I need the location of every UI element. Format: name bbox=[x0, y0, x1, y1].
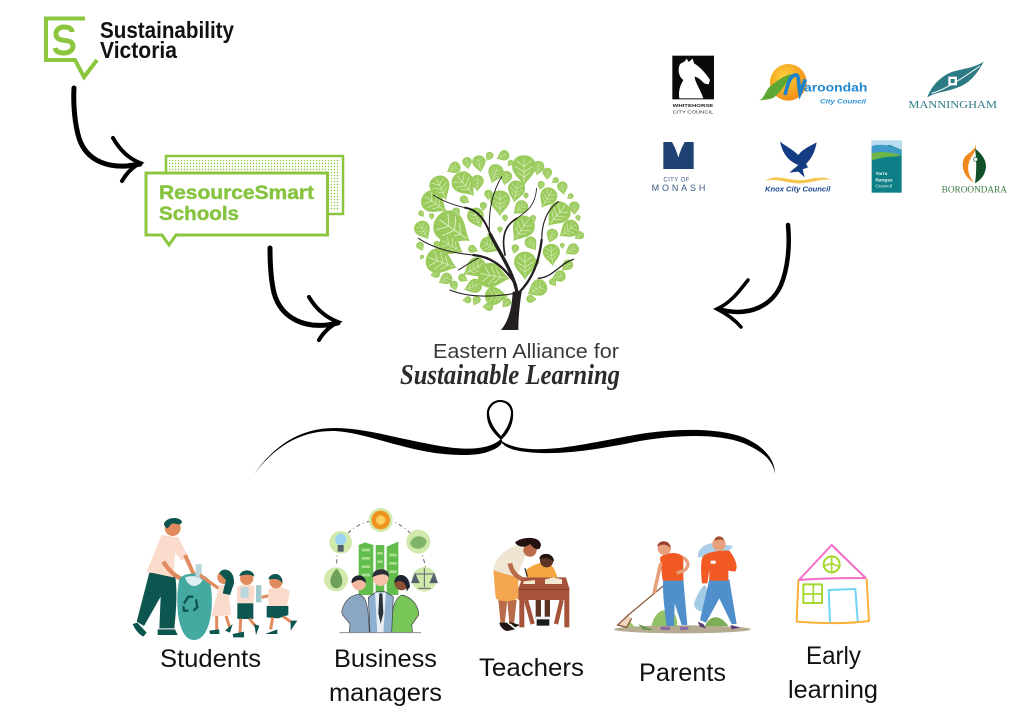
label: Students: Students bbox=[160, 645, 261, 673]
logo: Whitehorse bbox=[672, 56, 714, 115]
logo: Knox City Council bbox=[765, 141, 831, 194]
arrow: ResourceSmart to Alliance bbox=[270, 248, 338, 340]
icon: child's drawing of a house bbox=[797, 545, 869, 623]
logo: City of Monash: MONASH bbox=[652, 183, 705, 193]
icon: business team with green city bbox=[324, 508, 437, 633]
icon: green speech bracket bbox=[46, 18, 97, 77]
label: Business managers: managers bbox=[329, 679, 442, 707]
logo: Yarra Ranges: Council bbox=[875, 184, 892, 190]
logo: Whitehorse: CITY COUNCIL bbox=[673, 109, 714, 115]
logo: Manningham bbox=[908, 62, 997, 111]
logo: Whitehorse: WHITEHORSE bbox=[673, 103, 714, 109]
heading: Sustainable Learning: Sustainable Learning bbox=[400, 360, 620, 391]
logo: Boroondara bbox=[942, 141, 1007, 196]
logo: Maroondah: aroondah bbox=[804, 81, 867, 95]
logo: ResourceSmart Schools bbox=[146, 156, 343, 245]
text: programme name: Schools bbox=[159, 204, 239, 225]
audience labels bbox=[160, 642, 878, 707]
logo: Boroondara: BOROONDARA bbox=[942, 186, 1007, 196]
logo: Maroondah bbox=[759, 64, 867, 105]
tree trunk and branches bbox=[418, 177, 573, 330]
icon: adult and children recycling bbox=[133, 518, 297, 640]
logo: Maroondah: City Council bbox=[820, 98, 866, 105]
back dotted speech box bbox=[166, 156, 343, 214]
logo: Eastern Alliance tree bbox=[411, 148, 586, 330]
label: Business managers bbox=[329, 645, 442, 707]
text: organisation name: Sustainability bbox=[100, 17, 234, 43]
logo: Knox City Council: Knox City Council bbox=[765, 185, 831, 194]
arrow: councils to Alliance bbox=[717, 225, 789, 327]
text: programme name bbox=[159, 183, 315, 225]
text: programme name: ResourceSmart bbox=[159, 183, 315, 204]
text: organisation name: Victoria bbox=[100, 37, 177, 63]
logo: Manningham: MANNINGHAM bbox=[908, 100, 997, 111]
logo: City of Monash bbox=[652, 142, 705, 193]
heading: Eastern Alliance for: Eastern Alliance for bbox=[433, 341, 619, 363]
logo: Yarra Ranges: Yarra bbox=[875, 171, 888, 177]
logo: Sustainability Victoria bbox=[46, 17, 234, 77]
logo: Yarra Ranges bbox=[872, 141, 902, 193]
logo: City of Monash: CITY OF bbox=[663, 178, 690, 184]
label: Business managers: Business bbox=[334, 645, 437, 673]
audience illustrations, teachers, parents, early learning bbox=[493, 536, 869, 633]
front speech box bbox=[146, 173, 328, 245]
text: organisation name bbox=[100, 17, 234, 63]
icon: letter S bbox=[55, 27, 73, 53]
tree leaves bbox=[411, 148, 586, 311]
label: Teachers: Teachers bbox=[479, 654, 584, 682]
icon: teacher helping pupil at desk bbox=[493, 538, 569, 631]
label: Parents: Parents bbox=[639, 659, 726, 687]
label: Early learning: Early bbox=[806, 642, 861, 670]
arrow: Sustainability Victoria to ResourceSmart bbox=[74, 88, 140, 181]
label: Early learning bbox=[788, 642, 878, 704]
logo: Yarra Ranges: Ranges bbox=[875, 178, 893, 184]
decorative swirl with loop bbox=[254, 400, 775, 474]
icon: parents collecting litter bbox=[614, 536, 751, 633]
audience illustrations, students and business managers bbox=[133, 508, 437, 640]
council logos bbox=[652, 56, 1007, 196]
label: Early learning: learning bbox=[788, 676, 878, 704]
